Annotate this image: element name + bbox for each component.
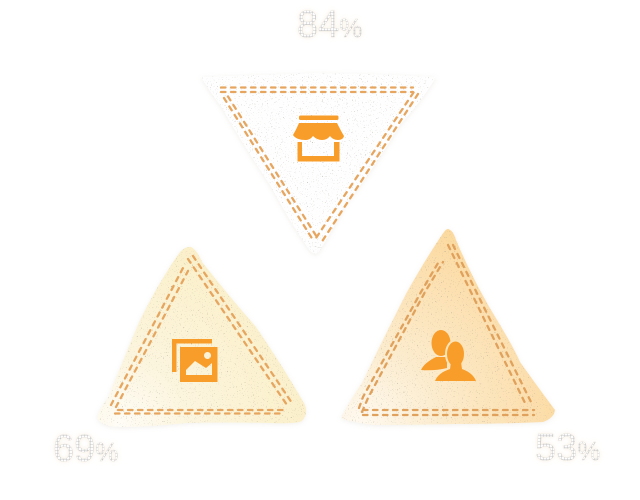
label: 69%: 69% <box>53 428 118 470</box>
label: 53%: 53% <box>535 427 600 469</box>
stitching <box>111 256 292 414</box>
panel: top triangle <box>201 73 436 254</box>
triangle shape: warm orange <box>341 229 555 425</box>
icon: image gallery <box>172 339 218 382</box>
stitching <box>221 88 418 243</box>
stitching <box>359 245 534 415</box>
panel: bottom-left triangle <box>97 247 306 427</box>
triangle shape: white <box>201 73 436 254</box>
panel: bottom-right triangle <box>341 229 555 425</box>
icon: storefront <box>293 116 344 162</box>
triangle shape: pale cream <box>97 247 306 427</box>
label: 84%: 84% <box>297 4 362 46</box>
icon: two people <box>421 330 476 381</box>
